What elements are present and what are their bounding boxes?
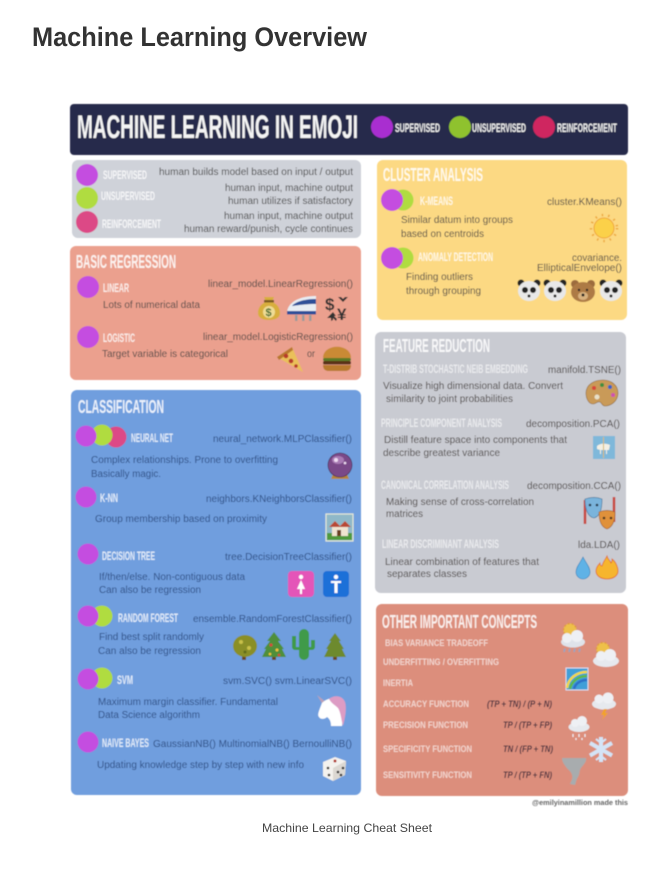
row: naive bayes: GaussianNB() MultinomialNB() BernoulliNB() [153,739,352,750]
icon: panda [518,280,540,301]
row: pca: PRINCIPLE COMPONENT ANALYSIS [381,416,502,430]
row: lda: Linear combination of features that [385,557,539,568]
row: pca: Distill feature space into components that [384,435,567,446]
row: k-means: cluster.KMeans() [547,197,622,208]
credit: @emilyinamillion made this [532,798,628,807]
row: svm: SVM [117,675,133,687]
row: naive bayes [78,732,352,771]
row: lda: LINEAR DISCRIMINANT ANALYSIS [382,537,499,551]
row: decision tree: Can also be regression [99,585,201,596]
panel: other important concepts [376,604,628,796]
icon: rainbow tile [566,668,588,690]
text: or: or [307,349,316,360]
row: logistic [77,326,353,360]
row: t-sne: T-DISTRIB STOCHASTIC NEIB EMBEDDING [383,362,528,376]
concept: specificity: TN / (FP + TN) [503,744,553,754]
row: svm: svm.SVC() svm.LinearSVC() [223,676,352,687]
icon: bear [571,280,595,302]
row: lda [382,537,620,580]
panel: feature reduction [375,332,626,593]
row: logistic: LOGISTIC [103,333,135,345]
row: logistic: Target variable is categorical [102,349,228,360]
concept: sensitivity: SENSITIVITY FUNCTION [383,770,472,780]
icon: panda [544,280,566,301]
row: lda: lda.LDA() [578,540,620,551]
row: linear: linear_model.LinearRegression() [208,279,353,290]
row: linear [77,276,353,311]
icon: houses tile [326,514,353,541]
icon: currency exchange [325,295,348,324]
banner title: MACHINE LEARNING IN EMOJI [77,109,358,145]
row: neural net: Basically magic. [91,469,161,480]
icon: cactus [292,629,315,660]
icon: bullet train [287,296,316,321]
row: naive bayes: NAIVE BAYES [102,738,149,750]
concept: precision: PRECISION FUNCTION [383,720,468,730]
icon: theatre masks [585,497,615,529]
row: random forest [78,606,352,657]
row: reinforcement: human reward/punish, cycle continues [184,224,353,235]
row: unsupervised [76,183,353,209]
row: cca: matrices [386,509,423,520]
icon: dice [323,757,346,781]
row: unsupervised: human input, machine output [225,183,353,194]
row: k-means: Similar datum into groups [401,215,513,226]
icon: pizza [277,347,303,372]
heading: CLASSIFICATION [78,397,164,417]
row: t-sne: manifold.TSNE() [548,365,621,376]
row: cca: decomposition.CCA() [527,481,621,492]
icon: deciduous tree [233,635,257,660]
page title: Machine Learning Overview [32,22,368,52]
concept: sensitivity: TP / (TP + FN) [503,770,552,780]
row: pca: describe greatest variance [383,448,500,459]
panel: classification [71,390,361,795]
row: decision tree: DECISION TREE [102,551,155,563]
row: unsupervised: UNSUPERVISED [101,191,155,203]
icon: evergreen tree [324,633,346,660]
row: neural net [76,424,352,480]
row: linear: LINEAR [103,283,129,295]
row: cca [381,478,621,520]
row: random forest: Find best split randomly [99,632,204,643]
row: pca [381,416,620,459]
panel: basic regression [70,246,361,380]
row: neural net: Complex relationships. Prone to overfitting [91,455,278,466]
row: reinforcement: REINFORCEMENT [102,219,161,231]
icon: carousel tile [593,436,615,459]
legend: supervised [371,116,440,138]
row: k-nn: K-NN [100,493,118,505]
concept: accuracy [383,699,552,709]
icon: crystal ball [328,453,352,479]
row: k-nn [76,486,352,525]
icon: tornado [562,758,586,785]
legend: unsupervised [449,116,526,138]
panel: cluster analysis [377,160,627,320]
icon: money bag: $ [266,307,272,319]
panel: learning types [72,160,361,238]
concept: bias variance: BIAS VARIANCE TRADEOFF [385,638,488,648]
row: random forest: Can also be regression [98,646,201,657]
row: neural net: neural_network.MLPClassifier() [213,434,352,445]
row: k-means [381,189,622,240]
icon: lightning cloud [592,692,616,720]
icon: water drop [576,557,590,579]
icon: christmas tree [262,632,286,660]
icon: unicorn [317,695,346,726]
icon: pink sign [288,571,314,597]
row: anomaly detection: ANOMALY DETECTION [418,252,493,264]
icon: sun [591,215,617,241]
row: pca: decomposition.PCA() [526,419,620,430]
row: supervised [76,164,353,186]
row: t-sne: Visualize high dimensional data. Convert [383,381,563,392]
concept: precision: TP / (TP + FP) [503,720,552,730]
heading: FEATURE REDUCTION [383,336,490,356]
row: k-nn: neighbors.KNeighborsClassifier() [206,494,352,505]
row: t-sne [383,362,621,405]
row: anomaly detection: through grouping [406,286,481,297]
legend: supervised: SUPERVISED [395,121,440,135]
row: svm [78,668,352,721]
row: svm: Maximum margin classifier. Fundamental [98,697,278,708]
concept: underfitting: UNDERFITTING / OVERFITTING [383,657,499,667]
row: k-nn: Group membership based on proximity [95,514,267,525]
heading: CLUSTER ANALYSIS [383,165,483,185]
row: anomaly detection [381,247,622,297]
row: anomaly detection: EllipticalEnvelope() [537,263,622,274]
row: svm: Data Science algorithm [98,710,200,721]
row: anomaly detection: Finding outliers [406,272,473,283]
row: t-sne: similarity to joint probabilities [386,394,513,405]
header banner [70,104,628,155]
row: reinforcement [76,211,353,235]
concept: sensitivity [383,770,552,780]
concept: accuracy: (TP + TN) / (P + N) [487,699,552,709]
icon: snow cloud [568,716,590,740]
concept: specificity: SPECIFICITY FUNCTION [383,744,472,754]
icon: snowflake [590,737,612,762]
icon: sun cloud rain [561,624,585,652]
row: unsupervised: human utilizes if satisfactory [228,196,353,207]
row: random forest: ensemble.RandomForestClassifier() [193,614,352,625]
row: cca: CANONICAL CORRELATION ANALYSIS [381,478,509,492]
icon: currency exchange: $ [325,295,335,314]
concept: specificity [383,744,553,754]
row: logistic: linear_model.LogisticRegression() [203,332,353,343]
icon: blue info sign [323,571,349,597]
icon: money bag [258,297,280,320]
concept: inertia: INERTIA [383,678,413,688]
row: anomaly detection: covariance. [572,253,622,264]
heading: BASIC REGRESSION [76,252,176,272]
heading: OTHER IMPORTANT CONCEPTS [382,612,537,632]
row: decision tree: If/then/else. Non-contiguous data [99,572,245,583]
legend: reinforcement [533,116,617,138]
row: naive bayes: Updating knowledge step by step with new info [97,760,304,771]
row: random forest: RANDOM FOREST [118,613,178,625]
icon: burger [323,347,351,371]
concept: precision [383,720,552,730]
row: decision tree: tree.DecisionTreeClassifier() [225,552,352,563]
icon: currency exchange: ¥ [337,305,347,324]
legend: unsupervised: UNSUPERVISED [472,121,526,135]
row: k-means: based on centroids [401,229,484,240]
row: k-means: K-MEANS [420,196,453,208]
icon: sun behind cloud [593,642,619,667]
row: supervised: SUPERVISED [103,170,147,182]
icon: panda [600,280,622,301]
icon: flame [596,556,618,579]
row: cca: Making sense of cross-correlation [386,497,534,508]
infographic [70,104,628,807]
row: neural net: NEURAL NET [131,433,173,445]
row: lda: separates classes [387,569,467,580]
caption: Machine Learning Cheat Sheet [262,821,433,835]
row: reinforcement: human input, machine output [224,211,353,222]
row: decision tree [78,544,352,596]
row: linear: Lots of numerical data [103,300,200,311]
concept: accuracy: ACCURACY FUNCTION [383,699,469,709]
icon: palette [586,380,618,406]
row: supervised: human builds model based on input / output [159,167,353,178]
